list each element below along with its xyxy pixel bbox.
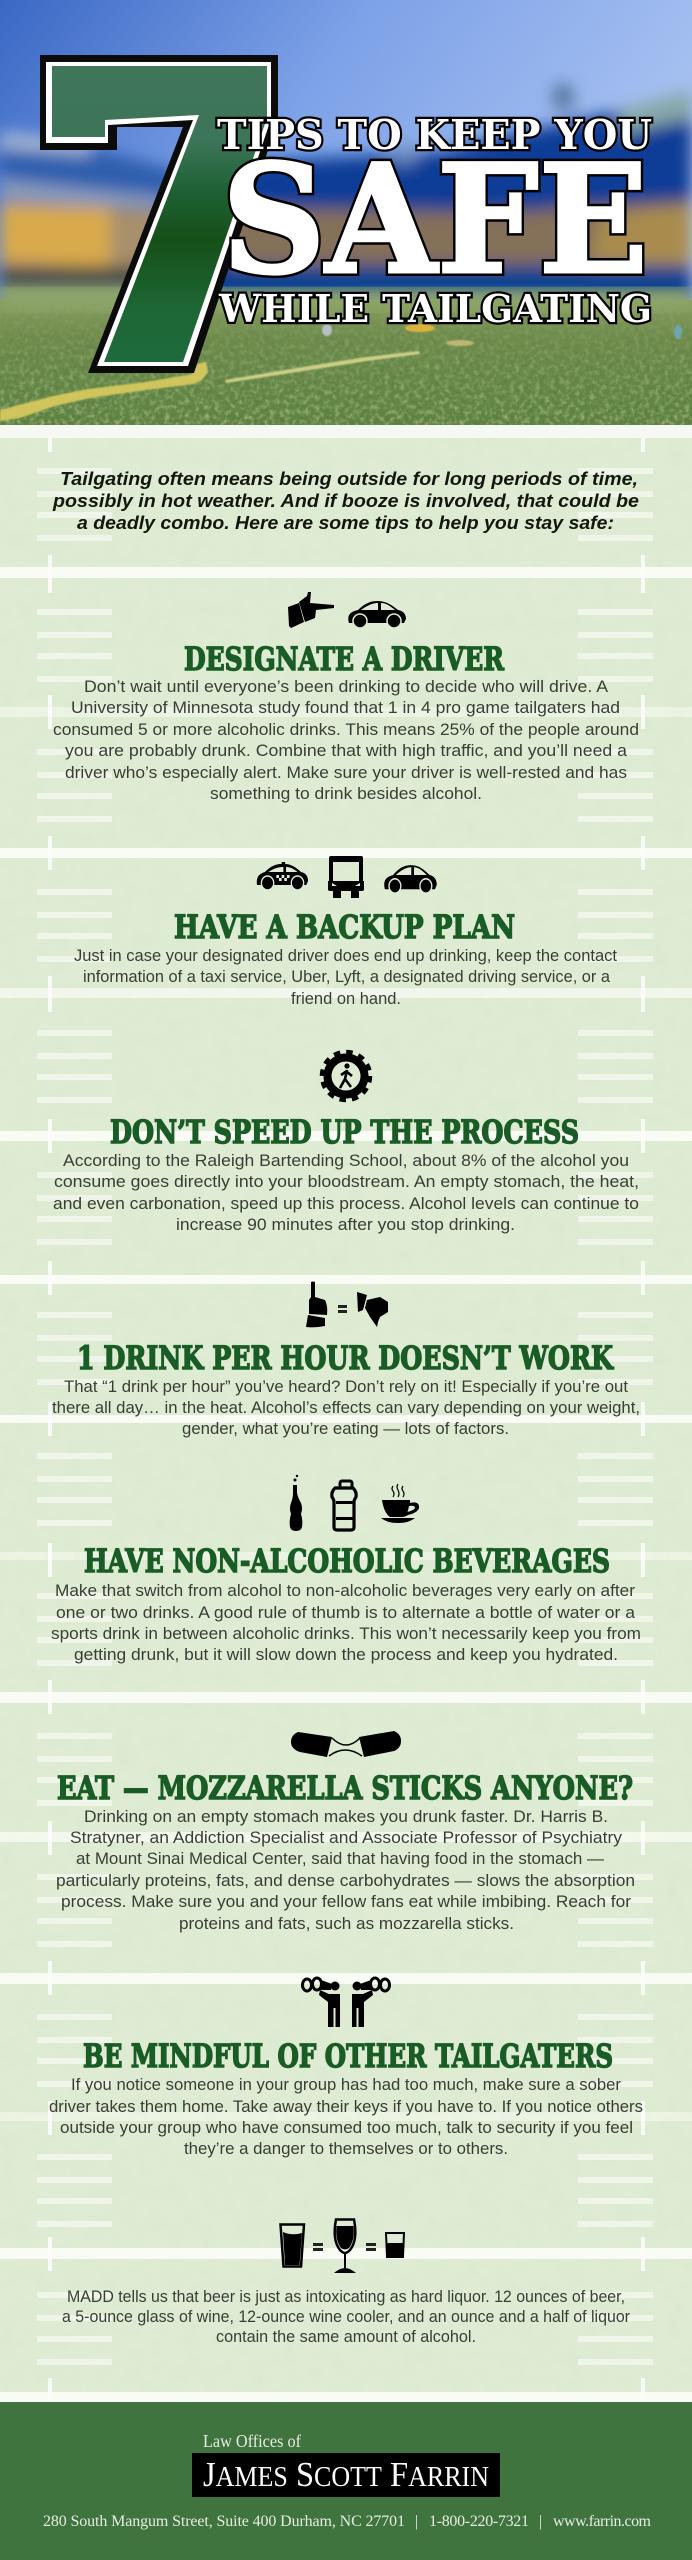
body text: That “1 drink per hour” you’ve heard? Don’t rely on it! Especially if you’re out — [64, 1377, 628, 1396]
body text: you are probably drunk. Combine that with high traffic, and you’ll need a — [65, 741, 628, 760]
icon: one finger raised — [306, 1282, 327, 1327]
body text: According to the Raleigh Bartending School, about 8% of the alcohol you — [63, 1151, 629, 1170]
contact line: | — [539, 2513, 542, 2530]
icon: two people with binoculars — [302, 1978, 390, 2027]
icon: equals sign — [366, 2243, 376, 2251]
body text: process. Make sure you and your fellow fans eat while imbibing. Reach for — [61, 1892, 631, 1911]
icon: gear with walking person — [322, 1052, 370, 1100]
footer panel — [0, 2402, 692, 2560]
section: don't speed up the process — [53, 1052, 639, 1234]
intro paragraph: Tailgating often means being outside for long periods of time, — [60, 469, 638, 489]
football field background — [0, 438, 692, 2402]
body text: Don’t wait until everyone’s been drinking to decide who will drive. A — [84, 677, 609, 696]
contact line: 1-800-220-7321 — [429, 2513, 529, 2530]
body text: If you notice someone in your group has had too much, make sure a sober — [71, 2075, 621, 2094]
body text: Drinking on an empty stomach makes you drunk faster. Dr. Harris B. — [84, 1807, 608, 1826]
body text: at Mount Sinai Medical Center, said that having food in the stomach — — [76, 1849, 604, 1868]
title line: while tailgating: WHILE TAILGATING — [218, 286, 652, 331]
logo box: JAMES SCOTT FARRIN — [203, 2455, 489, 2494]
contact line: | — [415, 2513, 418, 2530]
body text: outside your group who have consumed too much, talk to security if you feel — [60, 2118, 633, 2137]
title line: tips to keep you: TIPS TO KEEP YOU — [217, 111, 652, 159]
body text: they’re a danger to themselves or to others. — [184, 2139, 508, 2158]
body text: University of Minnesota study found that 1 in 4 pro game tailgaters had — [71, 698, 620, 717]
section: eat, mozzarella sticks — [56, 1731, 635, 1933]
heading: DESIGNATE A DRIVER — [184, 640, 504, 678]
body text: getting drunk, but it will slow down the process and keep you hydrated. — [74, 1645, 618, 1664]
body text: particularly proteins, fats, and dense carbohydrates — slows the absorption — [56, 1871, 635, 1890]
body text — [53, 677, 639, 803]
body text: consume goes directly into your bloodstream. An empty stomach, the heat, — [54, 1172, 639, 1191]
icon: equals sign — [313, 2243, 323, 2251]
icon: mozzarella stick pulled apart — [291, 1731, 401, 1757]
icon: car — [348, 601, 406, 628]
body text: driver who’s especially alert. Make sure your driver is well-rested and has — [65, 763, 627, 782]
body text — [51, 1581, 641, 1664]
icon: wine glass — [334, 2220, 356, 2273]
contact line: www.farrin.com — [553, 2513, 652, 2530]
body text: a 5-ounce glass of wine, 12-ounce wine cooler, and an ounce and a half of liquor — [62, 2307, 630, 2326]
icon: soda bottle — [290, 1475, 302, 1531]
body text — [56, 1807, 635, 1933]
body text: sports drink in between alcoholic drinks. This won’t necessarily keep you from — [51, 1624, 641, 1643]
body text: gender, what you’re eating — lots of factors. — [182, 1419, 509, 1438]
law offices label: Law Offices of — [203, 2431, 301, 2451]
icon: car — [384, 865, 437, 893]
body text: contain the same amount of alcohol. — [216, 2327, 476, 2346]
body text: driver takes them home. Take away their keys if you have to. If you notice others — [49, 2097, 643, 2116]
body text: something to drink besides alcohol. — [210, 784, 482, 803]
body text: Stratyner, an Addiction Specialist and Associate Professor of Psychiatry — [70, 1828, 623, 1847]
body text: friend on hand. — [291, 989, 401, 1008]
body text: MADD tells us that beer is just as intoxicating as hard liquor. 12 ounces of beer, — [67, 2287, 625, 2306]
contact line: 280 South Mangum Street, Suite 400 Durham, NC 27701 — [43, 2513, 405, 2530]
body text — [52, 1377, 640, 1438]
section: have a backup plan — [74, 856, 617, 1008]
title line: safe: SAFE — [222, 132, 648, 308]
body text: information of a taxi service, Uber, Lyft, a designated driving service, or a — [83, 967, 611, 986]
numeral 7 — [40, 55, 278, 373]
intro paragraph: a deadly combo. Here are some tips to help you stay safe: — [77, 513, 614, 533]
intro paragraph: possibly in hot weather. And if booze is involved, that could be — [52, 491, 639, 511]
icon: pointing hand — [288, 592, 334, 628]
icon: equals sign — [338, 1305, 347, 1313]
heading: DON’T SPEED UP THE PROCESS — [110, 1113, 579, 1151]
body text — [74, 946, 617, 1008]
section: be mindful of other tailgaters — [49, 1978, 643, 2158]
icon: sports drink jug — [332, 1481, 356, 1530]
section: designate a driver — [53, 592, 639, 803]
body text — [49, 2075, 643, 2158]
icon: shot glass — [386, 2233, 404, 2258]
icon: taxi — [257, 862, 308, 890]
intro paragraph — [52, 469, 639, 533]
body text: and even carbonation, speed up this process. Alcohol levels can continue to — [53, 1194, 639, 1213]
title line: safe: SAFE — [222, 132, 648, 308]
icon: beer glass — [280, 2224, 304, 2266]
body text: one or two drinks. A good rule of thumb is to alternate a bottle of water or a — [56, 1603, 636, 1622]
section: have non-alcoholic beverages — [51, 1475, 641, 1664]
hero title — [217, 111, 652, 331]
icon: coffee cup — [381, 1484, 419, 1523]
body text — [53, 1151, 639, 1234]
heading: HAVE A BACKUP PLAN — [174, 908, 515, 946]
contact line — [43, 2513, 652, 2530]
body text: consumed 5 or more alcoholic drinks. This means 25% of the people around — [53, 720, 639, 739]
body text: Make that switch from alcohol to non-alcoholic beverages very early on after — [55, 1581, 635, 1600]
body text: there all day… in the heat. Alcohol’s effects can vary depending on your weight, — [52, 1398, 640, 1417]
body text: proteins and fats, such as mozzarella sticks. — [179, 1914, 514, 1933]
section: drink equivalence — [62, 2220, 630, 2346]
hero photo: blurred stadium and grass — [0, 0, 692, 438]
body text: Just in case your designated driver does end up drinking, keep the contact — [74, 946, 617, 965]
section: 1 drink per hour doesn't work — [52, 1282, 640, 1438]
icon: thumbs down — [357, 1292, 388, 1327]
icon: bus — [328, 856, 364, 898]
body text: increase 90 minutes after you stop drinking. — [176, 1215, 515, 1234]
body text — [62, 2287, 630, 2346]
